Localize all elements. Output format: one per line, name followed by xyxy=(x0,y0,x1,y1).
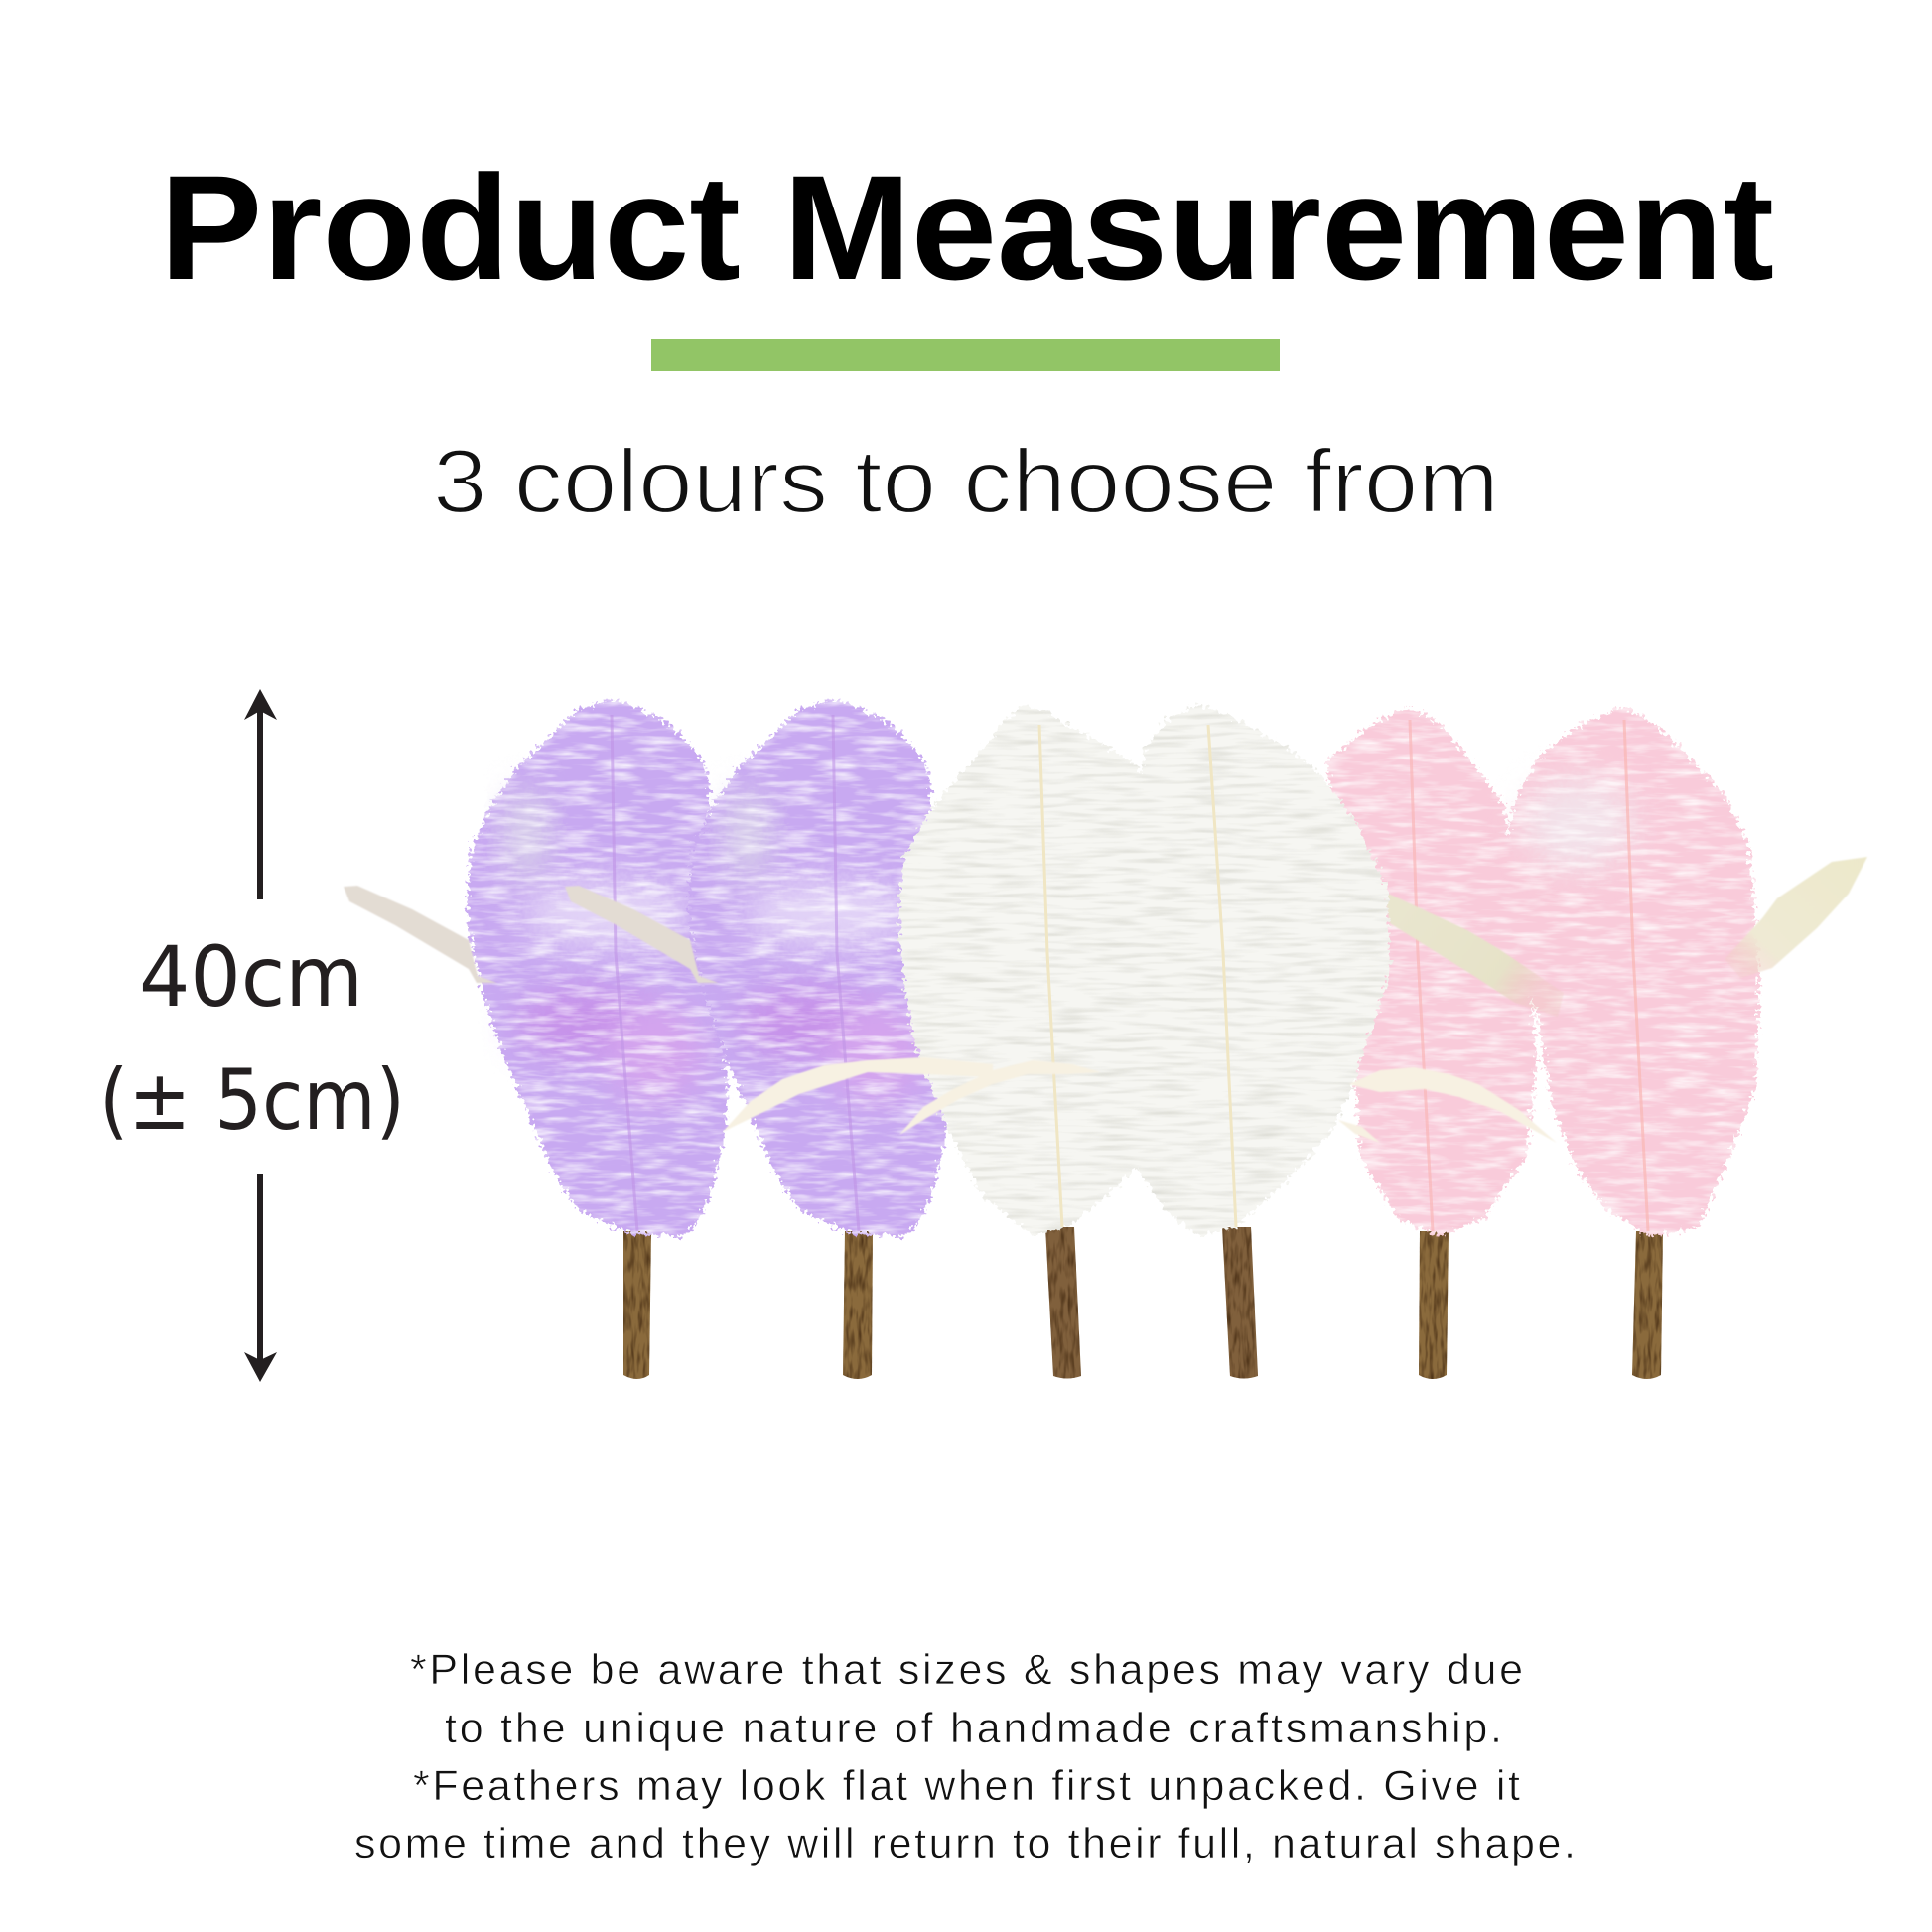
label: 40cm: 40cm xyxy=(139,928,363,1026)
stick: lilac feather 2 xyxy=(843,1231,873,1379)
white feather 2 xyxy=(1074,704,1390,1236)
stick: white feather 1 xyxy=(1045,1227,1081,1378)
shaft xyxy=(1624,720,1648,1231)
side quill xyxy=(344,886,497,983)
shaft xyxy=(1410,720,1433,1231)
lilac feather 1 xyxy=(344,699,728,1236)
note line 3: *Feathers may look flat when first unpacked. Give it xyxy=(413,1762,1520,1810)
feather row xyxy=(344,699,1867,1379)
cream side feathers xyxy=(723,1057,1557,1143)
side feather: right small tip xyxy=(1338,1120,1380,1143)
side feather: right xyxy=(1349,1067,1557,1143)
stick: pink feather 2 xyxy=(1632,1231,1663,1379)
title: Product Measurement xyxy=(160,144,1774,311)
footnote text xyxy=(354,1646,1576,1867)
measurement annotation xyxy=(99,689,405,1382)
green divider bar xyxy=(651,339,1280,371)
side quill xyxy=(565,886,719,983)
shaft xyxy=(612,715,637,1231)
shaft xyxy=(1208,725,1236,1227)
arrow: down xyxy=(244,1174,277,1382)
side feather: left inner xyxy=(899,1060,1101,1135)
shaft xyxy=(1039,725,1062,1227)
shaft xyxy=(833,715,859,1231)
arrow: up xyxy=(244,689,277,899)
side quill: pink feather 2 xyxy=(1725,857,1867,978)
white feather 1 xyxy=(899,704,1152,1236)
pink feather 1 xyxy=(1327,707,1537,1236)
stick: lilac feather 1 xyxy=(623,1231,651,1379)
stick: pink feather 1 xyxy=(1419,1231,1449,1379)
side feather: left outer xyxy=(723,1057,993,1132)
label: plus or minus 5cm: (± 5cm) xyxy=(99,1051,405,1149)
note line 2: to the unique nature of handmade craftsmanship. xyxy=(445,1705,1502,1752)
note line 1: *Please be aware that sizes & shapes may vary due xyxy=(410,1646,1523,1694)
note line 4: some time and they will return to their full, natural shape. xyxy=(354,1820,1576,1867)
side quill: pink feather 1 xyxy=(1384,892,1564,1017)
pink feather 2 xyxy=(1504,707,1759,1236)
lilac feather 2 xyxy=(565,699,949,1236)
stick: white feather 2 xyxy=(1222,1227,1258,1378)
subtitle: 3 colours to choose from xyxy=(433,432,1499,532)
